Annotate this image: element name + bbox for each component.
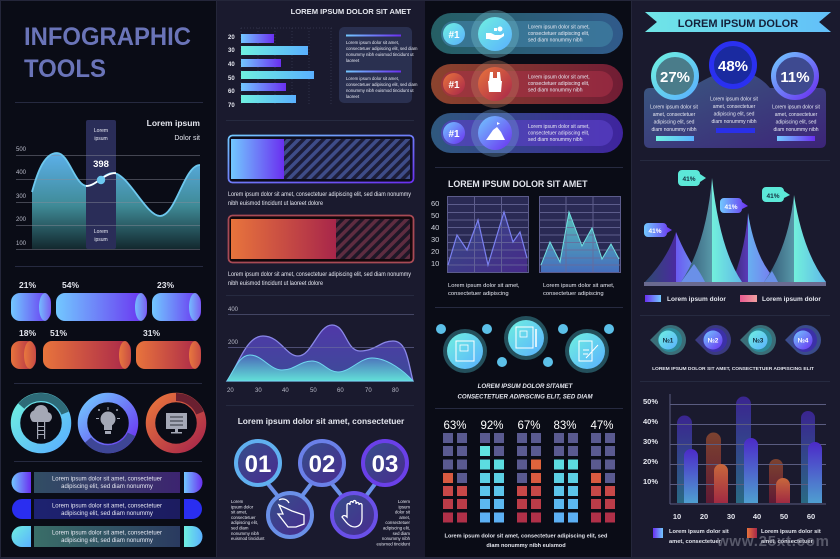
cylinder bars: blue: 23% (157, 280, 174, 290)
line chart: purple (448, 196, 528, 272)
mountain chart (644, 170, 826, 286)
progress bar: blue (228, 136, 414, 182)
y axis labels: 500 (16, 147, 27, 153)
y axis labels: 100 (16, 241, 27, 247)
badge 3: №3 (753, 338, 764, 344)
italic caption: LOREM IPSUM DOLOR SITAMET (478, 383, 574, 390)
base bar (644, 282, 826, 286)
y labels (643, 397, 658, 486)
stat text left (650, 104, 699, 133)
icon group: notebooks (436, 316, 614, 373)
badge 4 (785, 325, 821, 355)
step 01: 01 (245, 451, 271, 478)
heading: steps: Lorem ipsum dolor sit amet, consectetuer (238, 416, 405, 426)
chart caption: Lorem ipsum (147, 118, 200, 128)
title: INFOGRAPHIC (24, 23, 191, 51)
option pill 3: #1 (448, 129, 460, 140)
x labels: 10 (673, 512, 681, 521)
y axis labels: 200 (16, 217, 27, 223)
callout 41% two (678, 170, 706, 186)
stat text middle: amet, consectetuer (713, 104, 756, 110)
bar chart legend: Lorem ipsum dolor sit (669, 529, 729, 535)
right step text (377, 499, 411, 546)
option pill 1: #1 (448, 30, 460, 41)
left step text: adipiscing elit, (231, 520, 258, 525)
option pill 3: sed diam nonummy nibh (528, 137, 583, 143)
stat text left: amet, consectetuer (653, 112, 696, 118)
step 02: 02 (309, 451, 335, 478)
badge 1 (650, 325, 686, 355)
band text: Lorem (94, 128, 108, 134)
stat text middle (710, 96, 759, 125)
side text panel (339, 27, 418, 103)
option pill 2: sed diam nonummy nibh (528, 88, 583, 94)
peak 4 (764, 195, 794, 282)
mountain legend: Lorem ipsum dolor (667, 296, 726, 303)
column 92% (480, 433, 504, 522)
left step text: ipsum dolor (231, 504, 254, 509)
y labels: 50% (643, 397, 658, 406)
x labels: 40 (753, 512, 761, 521)
side text panel: consectetuer adipiscing elit, sed diam (346, 46, 418, 51)
right step text: consectetuer (385, 520, 411, 525)
stat text right: Lorem ipsum dolor sit (772, 104, 821, 110)
x labels (673, 512, 815, 521)
list row 1 (12, 472, 203, 493)
chart area fill (32, 153, 200, 249)
horizontal bar chart: 70 (228, 103, 235, 109)
list row 1: adipiscing elit, sed diam nonummy (61, 484, 153, 490)
y labels: 20% (643, 457, 658, 466)
y labels: 40% (643, 417, 658, 426)
right step text: amet, (399, 515, 410, 520)
x axis labels: 30 (255, 388, 262, 394)
column 47% (591, 433, 615, 522)
band text: ipsum (94, 237, 108, 243)
right step text: euismod tincidunt (377, 541, 411, 546)
donut: cloud finance (16, 397, 66, 448)
y axis labels: 20 (431, 247, 439, 256)
icon: open hand (332, 493, 376, 537)
option pill 3: Lorem ipsum dolor sit amet, (528, 124, 590, 130)
bars back (677, 396, 815, 503)
column 67% (517, 433, 541, 522)
horizontal bar chart: 40 (228, 62, 235, 68)
number badges (650, 325, 821, 355)
option pill 3 (431, 109, 623, 157)
grid lines (670, 394, 826, 504)
percentage labels: 47% (590, 420, 614, 432)
text block: nibh euismod tincidunt ut laoreet dolore (228, 201, 324, 207)
stat 48% (712, 44, 754, 86)
icon: document and pen (565, 329, 609, 373)
cylinder bars: red: 51% (50, 328, 67, 338)
square pictogram chart (443, 433, 615, 522)
y labels: 30% (643, 437, 658, 446)
option pill 3: consectetuer adipiscing elit, (528, 130, 589, 136)
stat text left: diam nonummy nibh (651, 127, 697, 133)
y axis labels: 30 (431, 235, 439, 244)
stat text left: adipiscing elit, sed (654, 120, 695, 126)
bar chart legend: Lorem ipsum dolor sit (761, 529, 821, 535)
stat 48%: 48% (718, 58, 748, 75)
horizontal bar chart (228, 28, 332, 109)
caption (445, 534, 608, 549)
area chart: lorem ipsum (16, 118, 200, 250)
callout 41% four (762, 187, 790, 202)
wave area chart (227, 307, 414, 394)
x labels: 20 (700, 512, 708, 521)
side text panel: laoreet (346, 58, 360, 63)
list row 3: adipiscing elit, sed diam nonummy (61, 538, 153, 544)
chart captions: Lorem ipsum dolor sit amet, (448, 283, 520, 289)
italic caption (457, 383, 593, 400)
chart captions: Lorem ipsum dolor sit amet, (543, 283, 615, 289)
cylinder bars: blue: 54% (62, 280, 79, 290)
icon: pointing hand (268, 493, 312, 537)
wave area chart: 400 (228, 307, 239, 313)
step 01 (236, 441, 280, 485)
stat 11%: 11% (780, 69, 810, 86)
horizontal bar chart: 30 (228, 48, 235, 54)
cylinder bars: red (11, 328, 201, 369)
heading: line charts: LOREM IPSUM DOLOR SIT AMET (448, 179, 588, 189)
percentage labels: 92% (480, 420, 504, 432)
icon: cloud and ladder (30, 405, 52, 439)
cylinder bars: blue (11, 280, 201, 321)
option pill 2: Lorem ipsum dolor sit amet, (528, 74, 590, 80)
band text: ipsum (94, 136, 108, 142)
ribbon banner (645, 12, 831, 32)
heading: column 2: LOREM IPSUM DOLOR SIT AMET (291, 7, 411, 16)
callout 41% one: 41% (648, 228, 662, 235)
badges caption: LOREM IPSUM DOLOR SIT AMET, CONSECTETUER ADIPISCING ELIT (652, 366, 814, 372)
x axis labels: 60 (337, 388, 344, 394)
left step text: nonummy nibh (231, 531, 260, 536)
data point (97, 176, 105, 184)
chart caption: Dolor sit (174, 135, 200, 142)
numbered steps (231, 441, 411, 546)
stat text middle: diam nonummy nibh (711, 119, 757, 125)
text block (228, 272, 411, 287)
band text: 398 (93, 159, 109, 170)
left step text: consectetuer (231, 515, 256, 520)
donut: monitor (150, 397, 202, 448)
band text: Lorem (94, 229, 108, 235)
y labels: 10% (643, 477, 658, 486)
column 83% (554, 433, 578, 522)
chart caption (147, 118, 200, 142)
right step text: dolor sit (395, 510, 411, 515)
x axis labels: 80 (392, 388, 399, 394)
peak 1 (645, 232, 676, 282)
stat 27% (654, 54, 696, 98)
bar chart legend: amet, consectetuer (669, 539, 722, 545)
ribbon banner: LOREM IPSUM DOLOR (678, 18, 798, 30)
stat 11% (774, 54, 816, 98)
text block: Lorem ipsum dolor sit amet, consectetuer adipiscing elit, sed diam nonummy (228, 272, 411, 278)
wave area chart: 200 (228, 340, 239, 346)
donut: light bulb (82, 398, 134, 449)
callout 41% one (644, 223, 672, 237)
column 63% (443, 433, 467, 522)
right step text: Lorem (398, 499, 410, 504)
icon: bulb (96, 407, 120, 434)
icon: hand with box (486, 26, 504, 40)
x labels: 60 (807, 512, 815, 521)
grid lines (16, 155, 200, 250)
right step text: adipiscing elit, (383, 526, 410, 530)
right step text: nonummy nibh (382, 536, 411, 541)
horizontal bar chart: 60 (228, 89, 235, 95)
highlight band (86, 120, 116, 249)
y axis labels (431, 199, 439, 268)
x axis labels: 40 (282, 388, 289, 394)
band text (93, 128, 109, 243)
y axis labels: 400 (16, 170, 27, 176)
stat text left: Lorem ipsum dolor sit (650, 104, 699, 110)
bar chart legend: amet, consectetuer (761, 539, 814, 545)
left step text: sit amet, (231, 510, 247, 515)
side text panel: laoreet (346, 94, 360, 99)
x axis labels (227, 388, 399, 394)
chart captions (448, 283, 615, 297)
stats panel (644, 44, 826, 148)
option pill 2: #1 (448, 80, 460, 91)
side text panel: nonummy nibh euismod tincidunt ut (346, 88, 414, 93)
title (24, 23, 191, 83)
option pill 2: consectetuer adipiscing elit, (528, 81, 589, 87)
badge 2 (695, 325, 731, 355)
right step text: ipsum (399, 504, 410, 509)
x axis labels: 20 (227, 388, 234, 394)
option pill 1: sed diam nonummy nibh (528, 38, 583, 44)
callout 41% two: 41% (682, 176, 696, 183)
percentage labels: 83% (553, 420, 577, 432)
stat text right: diam nonummy nibh (773, 127, 819, 133)
text block: nibh euismod tincidunt ut laoreet dolore (228, 281, 324, 287)
option pill 1: consectetuer adipiscing elit, (528, 31, 589, 37)
cylinder bars: red: 18% (19, 328, 36, 338)
side text panel: consectetuer adipiscing elit, sed diam (346, 82, 418, 87)
x labels: 30 (727, 512, 735, 521)
title: TOOLS (24, 55, 106, 83)
cylinder bars: red: 31% (143, 328, 160, 338)
callout 41% four: 41% (766, 193, 780, 200)
peak 2 (681, 178, 712, 282)
list row 2 (12, 499, 202, 519)
side text panel: Lorem ipsum dolor sit amet, (346, 40, 399, 45)
chart captions: consectetuer adipiscing (543, 291, 604, 297)
left step text: Lorem (231, 499, 244, 504)
left step text (231, 499, 265, 541)
line chart: teal (540, 196, 620, 272)
purple series (227, 325, 413, 381)
horizontal bar chart: 50 (228, 76, 235, 82)
mountain legend: Lorem ipsum dolor (762, 296, 821, 303)
list row 3 (12, 526, 203, 547)
option pill 1 (431, 10, 623, 58)
y axis labels: 10 (431, 259, 439, 268)
badge 1: №1 (663, 338, 674, 344)
stat text middle: adipiscing elit, sed (714, 112, 755, 118)
left step text: sed diam (231, 526, 249, 530)
x labels: 50 (780, 512, 788, 521)
horizontal bar chart: 20 (228, 35, 235, 41)
italic caption: CONSECTETUER ADIPISCING ELIT, SED DIAM (457, 394, 593, 400)
icon: gift bag (488, 72, 502, 92)
stat text middle: Lorem ipsum dolor sit (710, 96, 759, 102)
caption: diam nonummy nibh euismod (486, 543, 566, 549)
percentage labels: 63% (443, 420, 467, 432)
badge 4: №4 (798, 338, 809, 344)
percentage labels (443, 420, 614, 432)
bar chart (643, 394, 826, 521)
callout 41% three: 41% (724, 204, 738, 211)
text block (228, 192, 411, 207)
text block: Lorem ipsum dolor sit amet, consectetuer adipiscing elit, sed diam nonummy (228, 192, 411, 198)
y axis labels: 300 (16, 194, 27, 200)
y axis labels: 50 (431, 211, 439, 220)
bars front (684, 438, 822, 503)
bar chart legend (653, 528, 821, 545)
chart captions: consectetuer adipiscing (448, 291, 509, 297)
list row 3: Lorem ipsum dolor sit amet, consectetuer (52, 530, 162, 536)
peak 3 (732, 213, 748, 282)
stat text right: amet, consectetuer (775, 112, 818, 118)
icon: mountain flag (486, 122, 505, 140)
step 03: 03 (372, 451, 398, 478)
x axis labels: 70 (365, 388, 372, 394)
progress bar: red (228, 216, 414, 262)
callout 41% three (720, 198, 748, 213)
step 03 (363, 441, 407, 485)
list row 2: Lorem ipsum dolor sit amet, consectetuer (52, 504, 162, 510)
icon: book and pencil (504, 316, 548, 360)
caption: Lorem ipsum dolor sit amet, consectetuer adipiscing elit, sed (445, 534, 608, 540)
badge 2: №2 (708, 338, 719, 344)
option pill 1: Lorem ipsum dolor sit amet, (528, 24, 590, 30)
icon: monitor (166, 413, 187, 434)
y axis labels: 60 (431, 199, 439, 208)
stat text right: adipiscing elit, sed (776, 120, 817, 126)
teal series (227, 355, 413, 381)
mountain legend (645, 295, 821, 303)
side text panel: nonummy nibh euismod tincidunt ut (346, 52, 414, 57)
right step text: sed diam (393, 531, 410, 536)
icon: notebook (443, 329, 487, 373)
stat text right (772, 104, 821, 133)
watermark: www.25xt.com (716, 533, 829, 550)
left step text: euismod tincidunt (231, 536, 265, 541)
step 02 (300, 441, 344, 485)
y axis labels (16, 147, 27, 247)
side text panel: Lorem ipsum dolor sit amet, (346, 76, 399, 81)
curve line (32, 153, 200, 216)
stat 27%: 27% (660, 69, 690, 86)
x axis labels: 50 (310, 388, 317, 394)
y axis labels: 40 (431, 223, 439, 232)
list row 2: adipiscing elit, sed diam nonummy (61, 511, 153, 517)
cylinder bars: blue: 21% (19, 280, 36, 290)
percentage labels: 67% (517, 420, 541, 432)
list row 1: Lorem ipsum dolor sit amet, consectetuer (52, 476, 162, 482)
badge 3 (740, 325, 776, 355)
option pill 2 (431, 60, 623, 108)
